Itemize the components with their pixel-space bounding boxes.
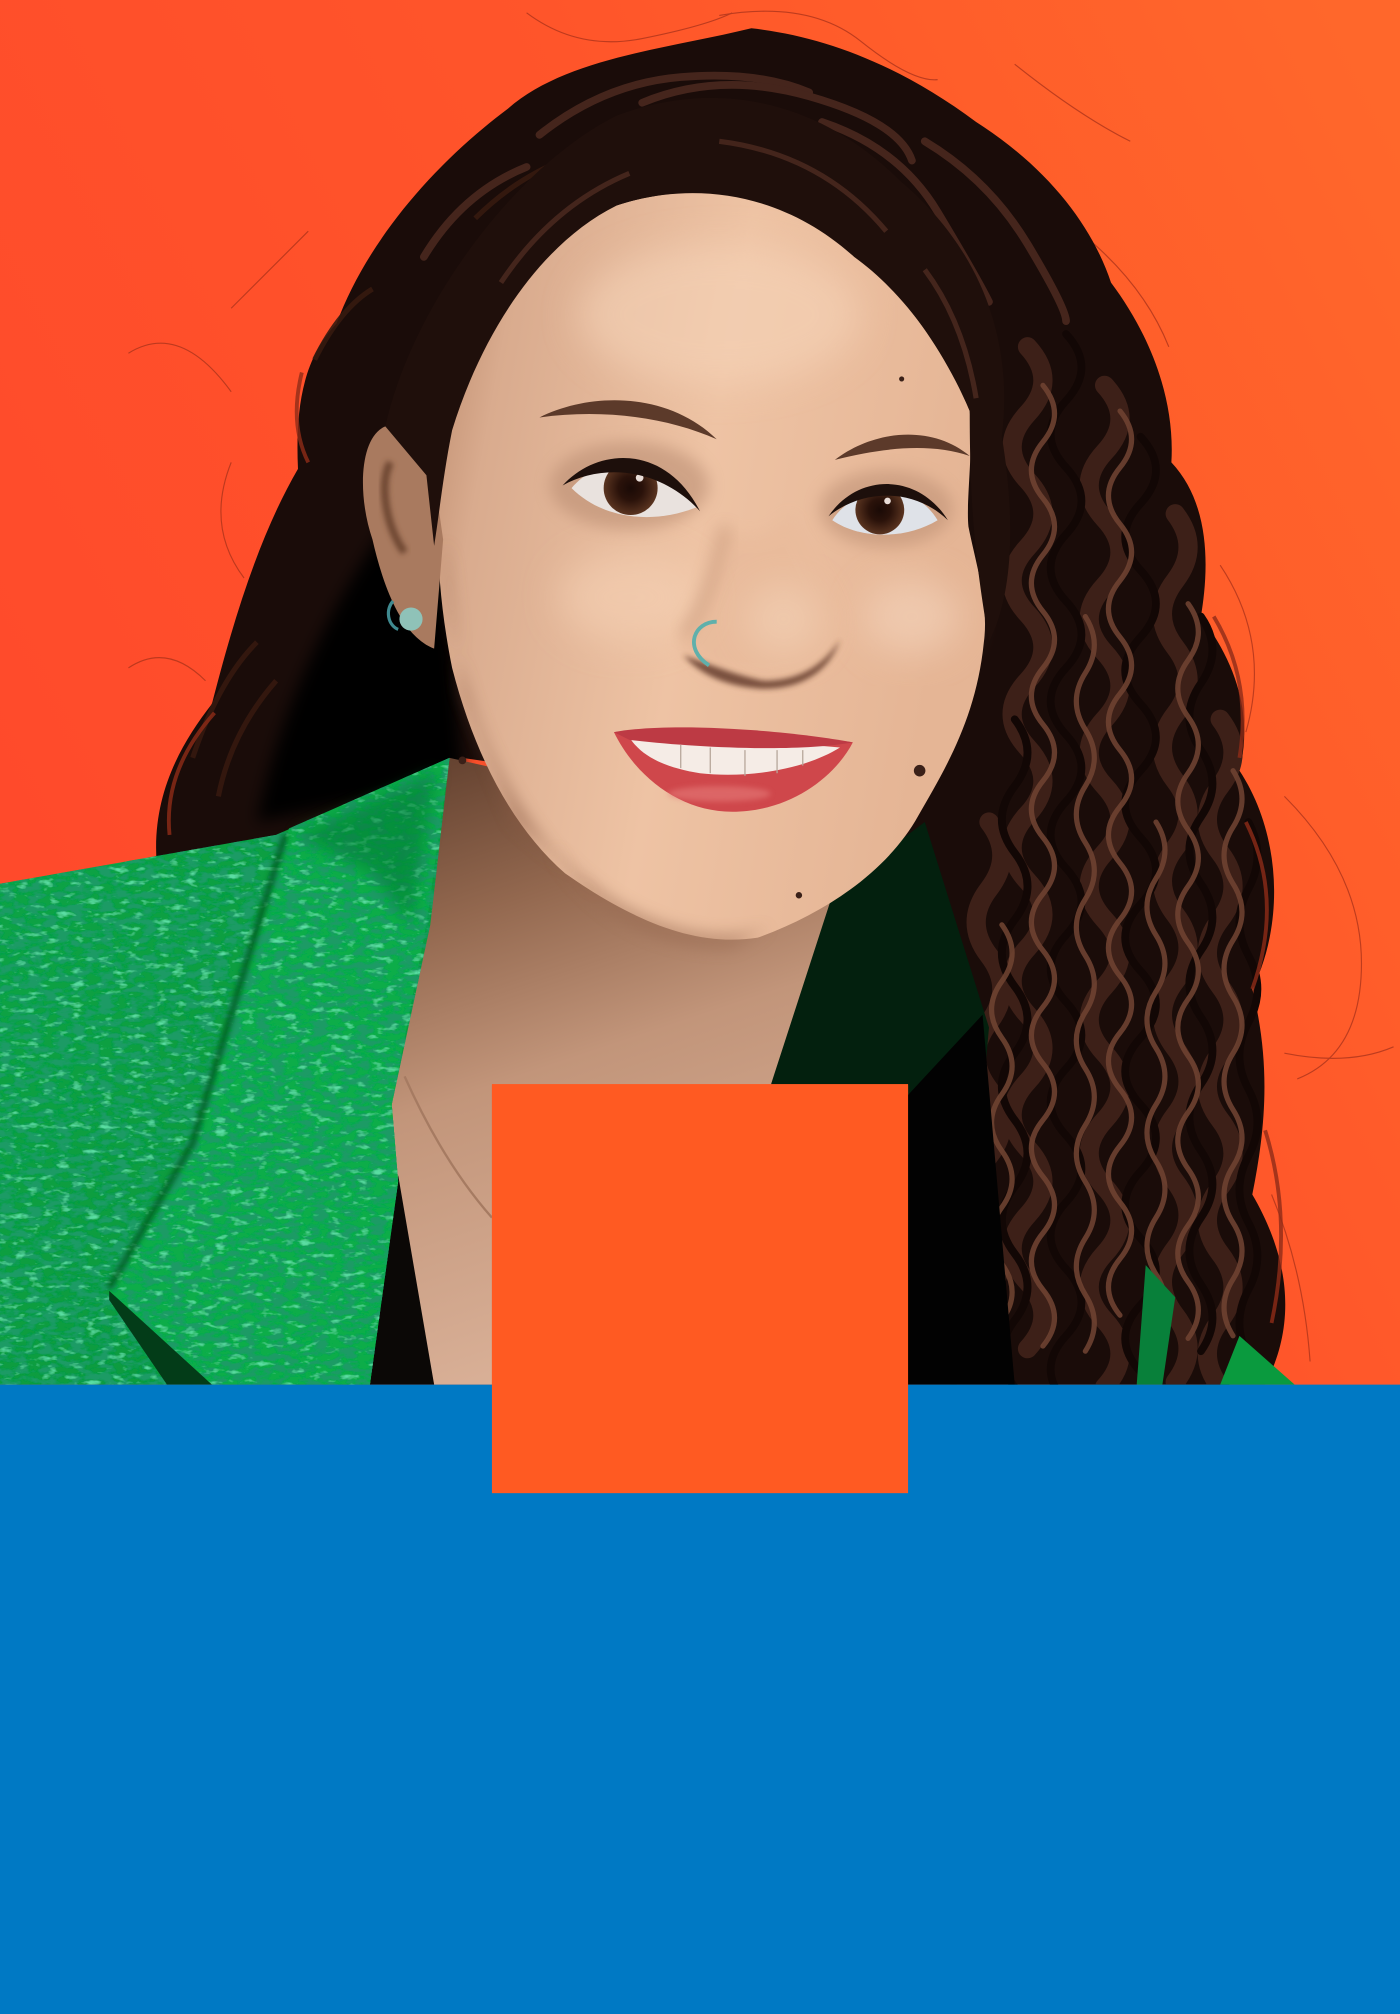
lapel xyxy=(109,758,450,1385)
nose xyxy=(678,514,842,689)
stray hair flyaways xyxy=(128,11,1394,1362)
black top xyxy=(370,1175,434,1385)
earring xyxy=(388,601,423,631)
hair over forehead and right cheek xyxy=(385,98,1010,642)
moles xyxy=(459,376,925,898)
lapel shadow xyxy=(109,1291,212,1385)
green jacket xyxy=(0,758,450,1385)
crown highlights xyxy=(424,76,1066,321)
left eyebrow xyxy=(539,400,717,439)
right eye xyxy=(819,470,953,547)
photo background xyxy=(0,0,1400,1387)
right curls highlight xyxy=(992,385,1242,1351)
lapel edge shadow xyxy=(109,835,285,1288)
cheek highlights xyxy=(559,552,700,642)
orange square xyxy=(492,1084,908,1493)
jacket back right xyxy=(771,822,1295,1385)
left eye xyxy=(550,442,709,529)
right eyebrow xyxy=(835,435,970,460)
mouth xyxy=(614,727,853,812)
left cheek shadow xyxy=(447,539,604,899)
forehead highlight xyxy=(578,244,861,385)
blue lower panel xyxy=(0,1385,1400,2014)
red rim light xyxy=(169,372,1281,1323)
hair mass xyxy=(156,28,1285,1403)
left ear xyxy=(363,426,443,649)
portrait photo xyxy=(0,11,1394,1403)
jaw shadow xyxy=(552,848,771,948)
necklace xyxy=(405,1076,492,1218)
right curls shadow xyxy=(1002,334,1257,1403)
nose ring xyxy=(694,622,717,665)
left hair shadow xyxy=(257,462,462,822)
right curls base xyxy=(976,347,1233,1387)
neck and chest xyxy=(379,758,848,1385)
face xyxy=(363,192,985,948)
